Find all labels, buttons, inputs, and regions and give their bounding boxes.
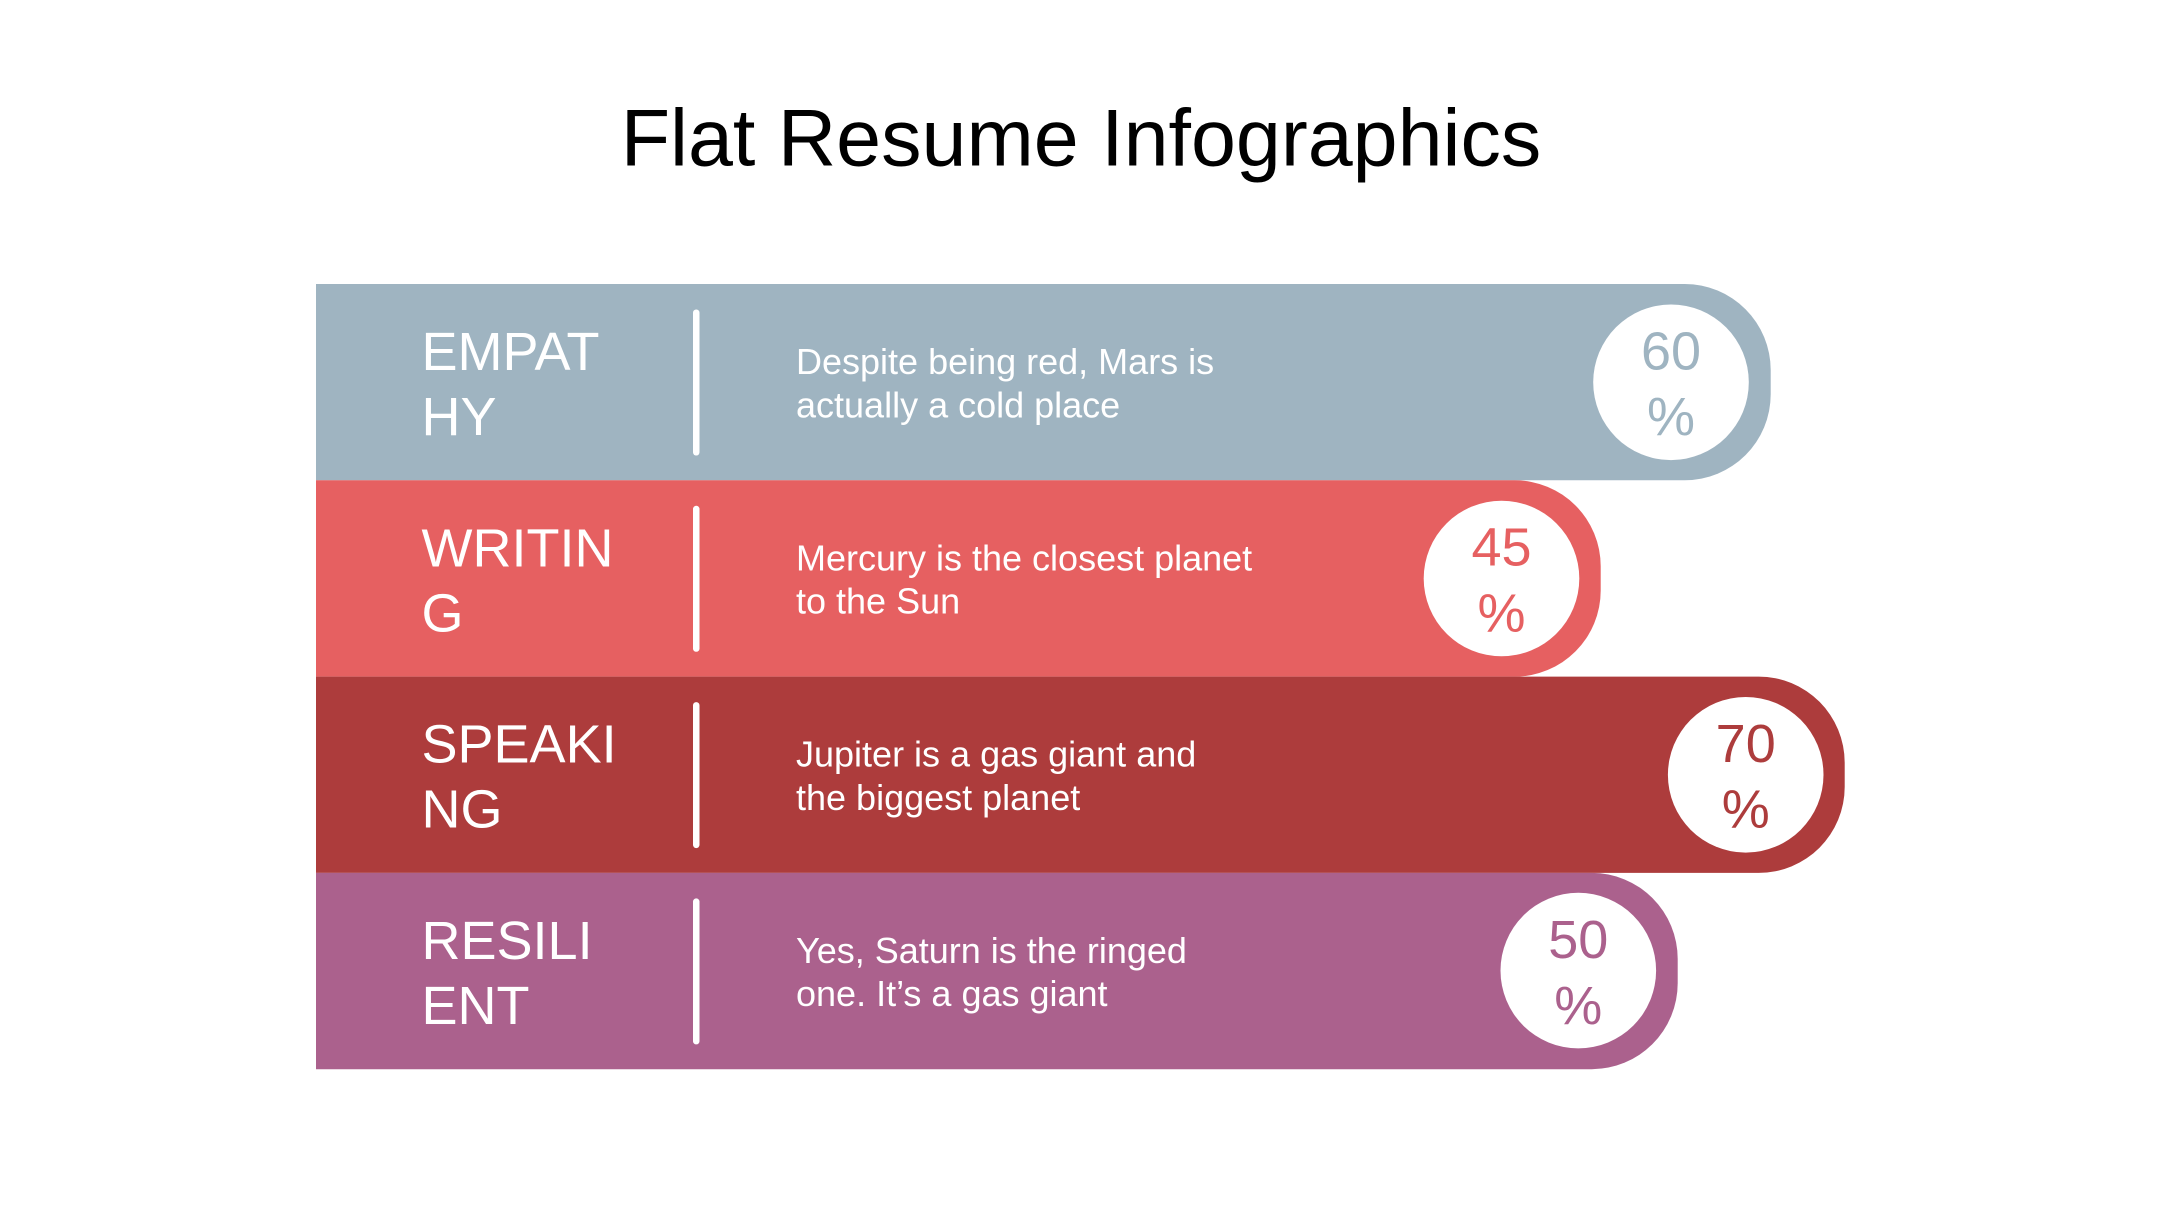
description: speaking: Jupiter is a gas giant and bbox=[796, 734, 1196, 775]
percentage circle: 70% bbox=[1668, 697, 1823, 853]
divider: speaking bbox=[693, 702, 700, 848]
description: speaking: the biggest planet bbox=[796, 777, 1080, 818]
percentage circle: 45%: % bbox=[1477, 583, 1526, 643]
label: empathy: HY bbox=[422, 387, 497, 447]
percentage circle: 60%: % bbox=[1647, 387, 1695, 447]
bar: writing 45% bbox=[316, 480, 1601, 677]
percentage circle: 70%: % bbox=[1722, 780, 1770, 840]
percentage circle: 50%: 50 bbox=[1548, 910, 1608, 970]
label: writing: WRITIN bbox=[422, 518, 613, 578]
label: resilient: ENT bbox=[422, 976, 530, 1036]
percentage circle: 50%: % bbox=[1554, 976, 1602, 1036]
percentage circle: 50% bbox=[1500, 893, 1656, 1048]
panel: speaking row bbox=[316, 677, 1845, 873]
percentage circle: 60% bbox=[1593, 304, 1749, 460]
label: speaking: NG bbox=[422, 780, 502, 840]
panel: empathy row bbox=[316, 284, 1771, 480]
label: resilient: RESILI bbox=[422, 911, 593, 971]
percentage circle: 60%: 60 bbox=[1641, 321, 1701, 381]
percentage circle: 45% bbox=[1424, 501, 1579, 656]
panel: resilient row bbox=[316, 873, 1678, 1069]
divider: empathy bbox=[693, 310, 700, 456]
bar: empathy 60% bbox=[316, 284, 1771, 480]
divider: resilient bbox=[693, 898, 700, 1044]
description: empathy: actually a cold place bbox=[796, 384, 1120, 425]
panel: writing row bbox=[316, 480, 1601, 677]
percentage circle: 70%: 70 bbox=[1716, 714, 1776, 774]
label: writing: G bbox=[422, 583, 464, 643]
percentage circle: 45%: 45 bbox=[1471, 518, 1532, 578]
description: resilient: Yes, Saturn is the ringed bbox=[796, 930, 1187, 971]
divider: writing bbox=[693, 506, 700, 652]
description: resilient: one. It’s a gas giant bbox=[796, 973, 1108, 1014]
description: writing: to the Sun bbox=[796, 581, 960, 622]
description: writing: Mercury is the closest planet bbox=[796, 537, 1252, 578]
title: Flat Resume Infographics bbox=[621, 94, 1541, 184]
bar: speaking 70% bbox=[316, 677, 1845, 873]
description: empathy: Despite being red, Mars is bbox=[796, 341, 1214, 382]
label: empathy: EMPAT bbox=[422, 322, 600, 382]
label: speaking: SPEAKI bbox=[422, 715, 617, 775]
bar: resilient 50% bbox=[316, 873, 1678, 1069]
